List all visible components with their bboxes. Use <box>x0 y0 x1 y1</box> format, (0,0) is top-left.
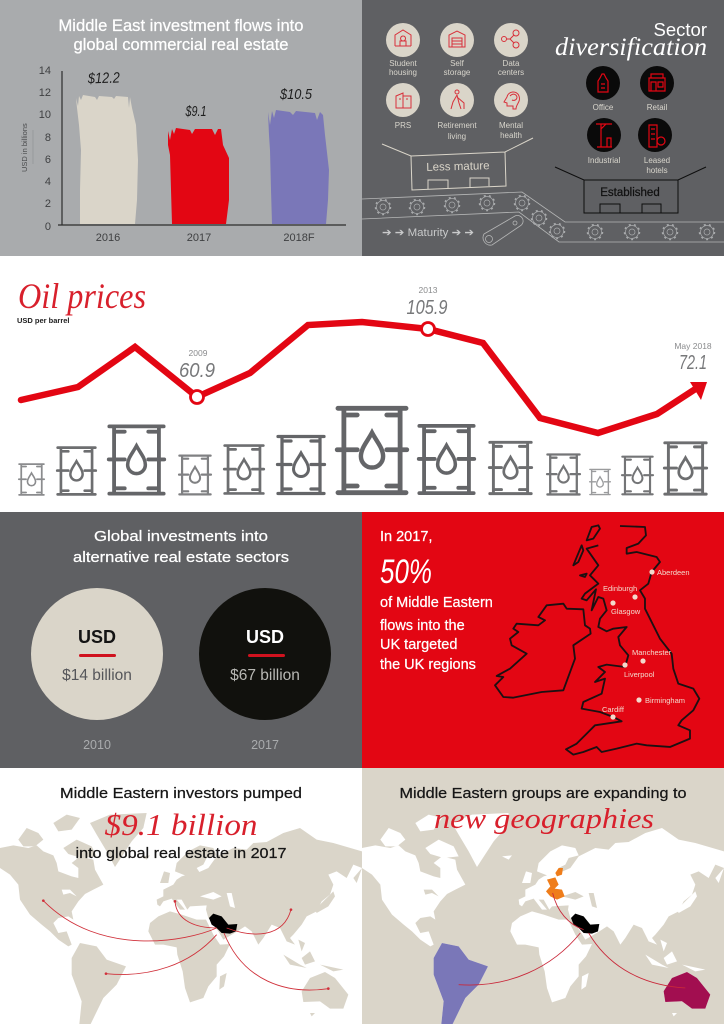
maturity label: ➔ ➔ Maturity ➔ ➔ <box>382 227 474 239</box>
less mature sector icons: living <box>448 132 466 141</box>
subheading: USD per barrel: USD per barrel <box>17 316 70 325</box>
established sector icons <box>586 66 674 175</box>
line chart: oil price: 105.9 <box>406 297 448 319</box>
heading: investors pumped: Middle Eastern investors pumped <box>60 785 302 802</box>
established sector icons: Leased <box>644 156 670 165</box>
map: UK and Ireland <box>495 525 699 755</box>
bar chart: 2 <box>45 198 51 210</box>
city markers: Manchester <box>632 648 672 657</box>
bar chart: 6 <box>45 154 51 166</box>
panel: sector diversification <box>362 0 724 256</box>
heading: sector diversification: diversification <box>555 34 707 61</box>
established sector icons: Industrial <box>588 156 620 165</box>
line chart: oil price: 2013 <box>419 285 438 295</box>
heading: investors pumped: $9.1 billion <box>104 807 258 842</box>
bar chart: 14 <box>39 65 51 77</box>
panel: new geographies map <box>362 768 724 1024</box>
arrows from Middle East <box>42 899 330 990</box>
city markers: Birmingham <box>645 696 685 705</box>
circle: 2010: USD <box>78 627 116 647</box>
heading: global investments <box>73 528 289 566</box>
less mature sector icons: Data <box>503 59 520 68</box>
panel: oil prices <box>0 256 724 512</box>
city markers: Liverpool <box>624 670 655 679</box>
city markers: Edinburgh <box>603 584 637 593</box>
less mature sector icons <box>386 23 528 141</box>
callout text: flows into the <box>380 618 465 634</box>
barrels <box>19 408 707 495</box>
callout text: of Middle Eastern <box>380 595 493 611</box>
less mature sector icons: health <box>500 131 522 140</box>
bar chart: 2017 <box>187 232 211 244</box>
circle: 2017: $67 billion <box>230 667 300 684</box>
panel: investment flows <box>0 0 362 256</box>
less mature sector icons: Mental <box>499 121 523 130</box>
bar chart: 2018F <box>283 232 315 244</box>
city markers <box>602 568 690 720</box>
line chart: oil price <box>21 285 712 433</box>
established sector icons: Office <box>593 103 614 112</box>
pulley <box>483 215 523 245</box>
panel: global investments <box>0 512 362 768</box>
bar chart: $9.1 <box>185 103 206 120</box>
bar chart: 2016 <box>96 232 120 244</box>
circle: 2010 <box>31 588 163 752</box>
heading: new geographies: Middle Eastern groups are expanding to <box>400 785 686 802</box>
less mature sector icons: housing <box>389 68 417 77</box>
line chart: oil price: 60.9 <box>179 360 215 382</box>
world map <box>362 813 724 1024</box>
bar chart: 4 <box>45 176 51 188</box>
box: established <box>555 167 706 213</box>
city markers: Glasgow <box>611 607 641 616</box>
circle: 2017: USD <box>246 627 284 647</box>
less mature sector icons: Student <box>389 59 418 68</box>
bar chart: USD in billions <box>20 123 29 172</box>
line chart: oil price: May 2018 <box>674 341 712 351</box>
bar chart <box>20 65 346 244</box>
box: less mature <box>382 138 533 190</box>
heading: sector diversification: Sector <box>654 19 707 40</box>
box: less mature: Less mature <box>426 160 490 174</box>
circle: 2010: $14 billion <box>62 667 132 684</box>
highlighted regions and arrows <box>434 868 710 1024</box>
heading: investors pumped <box>60 785 302 862</box>
city markers: Cardiff <box>602 705 625 714</box>
established sector icons: hotels <box>646 166 668 175</box>
heading: investment flows <box>58 17 304 54</box>
heading: sector diversification <box>555 19 707 61</box>
heading: new geographies <box>400 785 686 835</box>
heading: global investments: alternative real estate sectors <box>73 549 289 566</box>
less mature sector icons: PRS <box>395 121 411 130</box>
heading: oil prices: Oil prices <box>18 276 146 316</box>
panel: UK regions <box>362 512 724 768</box>
heading: new geographies: new geographies <box>434 804 654 835</box>
bar chart: 0 <box>45 221 51 233</box>
callout text: the UK regions <box>380 657 476 673</box>
heading: investment flows: Middle East investment flows into <box>58 17 304 35</box>
panel: global real estate map <box>0 768 362 1024</box>
heading: investment flows: global commercial real estate <box>74 36 288 54</box>
bar chart: 8 <box>45 132 51 144</box>
callout text <box>380 529 493 673</box>
heading: investors pumped: into global real estate in 2017 <box>76 845 286 862</box>
circle: 2017: 2017 <box>251 738 279 752</box>
less mature sector icons: centers <box>498 68 524 77</box>
city markers: Aberdeen <box>657 568 690 577</box>
box: established: Established <box>600 187 660 199</box>
line chart: oil price: 2009 <box>189 348 208 358</box>
bar chart: 12 <box>39 87 51 99</box>
bar chart: $12.2 <box>87 69 121 88</box>
bar chart: $10.5 <box>279 86 313 103</box>
bar chart: 10 <box>39 109 51 121</box>
less mature sector icons: storage <box>444 68 471 77</box>
less mature sector icons: Self <box>450 59 465 68</box>
heading: global investments: Global investments into <box>94 528 268 545</box>
conveyor belt <box>362 192 724 245</box>
callout text: 50% <box>380 553 432 591</box>
circle: 2010: 2010 <box>83 738 111 752</box>
circle: 2017 <box>199 588 331 752</box>
established sector icons: Retail <box>647 103 667 112</box>
less mature sector icons: Retirement <box>437 121 477 130</box>
world map <box>0 813 362 1024</box>
callout text: In 2017, <box>380 529 432 545</box>
callout text: UK targeted <box>380 637 457 653</box>
line chart: oil price: 72.1 <box>679 352 707 374</box>
